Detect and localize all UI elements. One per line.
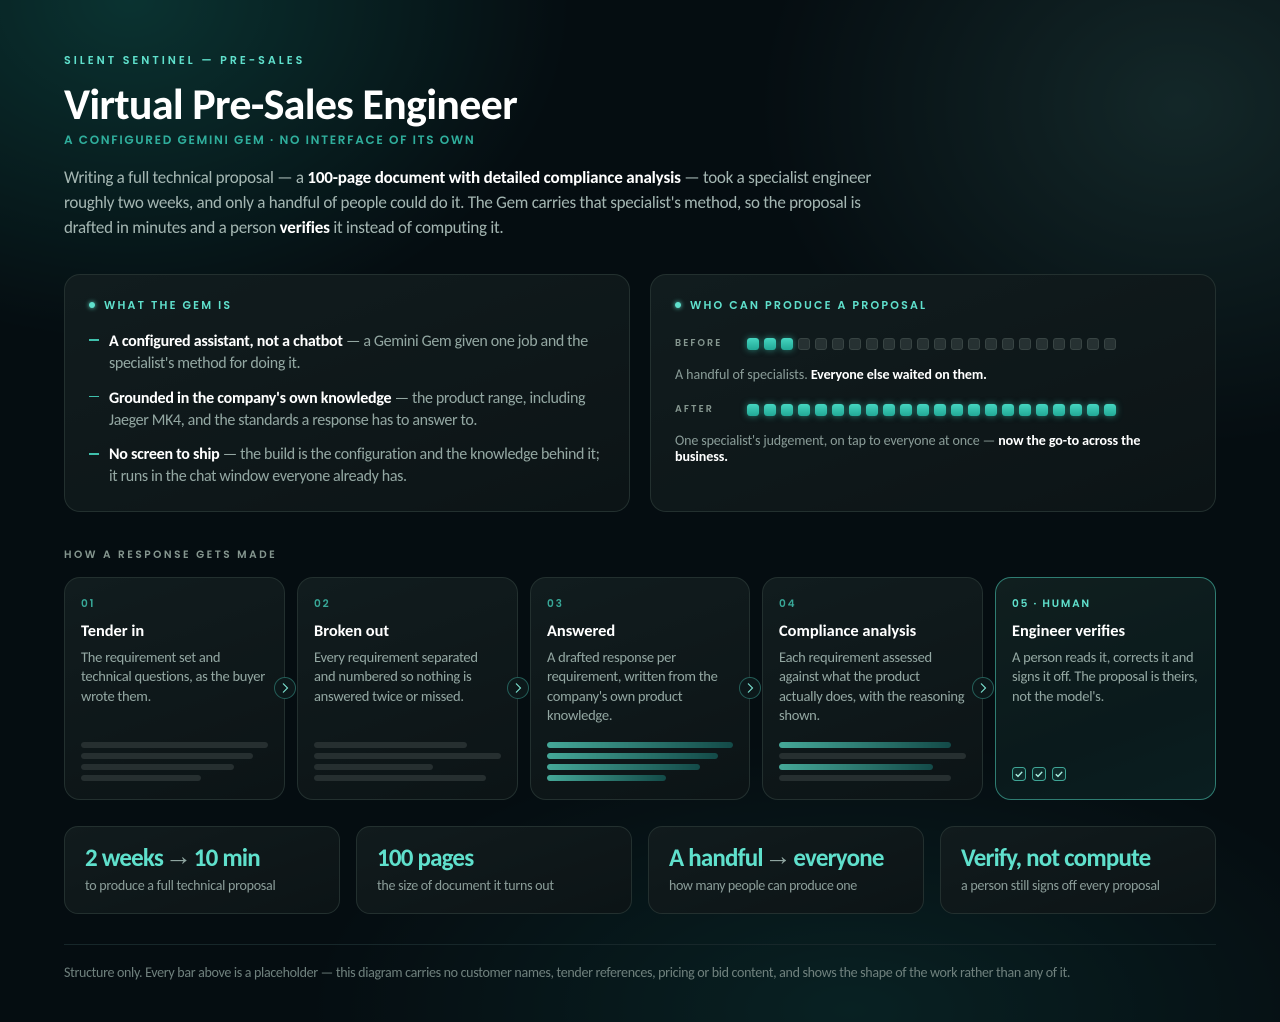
- section heading: HOW A RESPONSE GETS MADE: [64, 547, 277, 562]
- intro paragraph: drafted in minutes and a person verifies it instead of computing it.: [64, 217, 503, 238]
- step number: 03: [547, 596, 564, 611]
- list item 1: [109, 332, 588, 373]
- list item 2: [109, 389, 586, 430]
- step description: The requirement set and: [81, 648, 220, 666]
- step description: [547, 648, 718, 724]
- step description: shown.: [779, 706, 820, 724]
- panel: who can produce a proposal: [650, 274, 1216, 512]
- before dot row: [742, 334, 1116, 354]
- arrow 2: [507, 677, 529, 699]
- arrow 4: [972, 677, 994, 699]
- step description: knowledge.: [547, 706, 612, 724]
- stat value: 100 pages: [377, 842, 473, 873]
- step title: Tender in: [81, 621, 144, 641]
- panel: what the gem is: [64, 274, 630, 512]
- step 5: human: [995, 577, 1216, 800]
- step description: and numbered so nothing is: [314, 667, 471, 685]
- after dot row: [742, 400, 1120, 420]
- step description: not the model's.: [1012, 687, 1104, 705]
- intro paragraph: roughly two weeks, and only a handful of people could do it. The Gem carries that specialist's method, so the proposal is: [64, 192, 861, 213]
- step title: Broken out: [314, 621, 389, 641]
- list item 1: A configured assistant, not a chatbot — a Gemini Gem given one job and the: [109, 332, 588, 351]
- step description: A drafted response per: [547, 648, 676, 666]
- step title: Engineer verifies: [1012, 621, 1125, 641]
- placeholder bars: [81, 742, 268, 781]
- step description: Every requirement separated: [314, 648, 478, 666]
- step number: 04: [779, 596, 796, 611]
- step description: answered twice or missed.: [314, 687, 464, 705]
- list item 3: it runs in the chat window everyone already has.: [109, 467, 407, 486]
- step description: requirement, written from the: [547, 667, 718, 685]
- step description: wrote them.: [81, 687, 151, 705]
- eyebrow: SILENT SENTINEL — PRE-SALES: [64, 52, 305, 68]
- stat value: 2 weeks → 10 min: [85, 841, 260, 873]
- stat: people: [648, 826, 924, 914]
- stat caption: the size of document it turns out: [377, 877, 554, 894]
- list item 2: Jaeger MK4, and the standards a response has to answer to.: [109, 411, 477, 430]
- stat caption: a person still signs off every proposal: [961, 877, 1160, 894]
- intro paragraph: [64, 167, 871, 238]
- before caption: A handful of specialists. Everyone else waited on them.: [675, 366, 987, 383]
- step description: actually does, with the reasoning: [779, 687, 964, 705]
- list dashes: [89, 339, 99, 340]
- after caption: [675, 432, 1140, 465]
- panel heading: WHAT THE GEM IS: [104, 297, 232, 313]
- subtitle: A CONFIGURED GEMINI GEM · NO INTERFACE OF ITS OWN: [64, 132, 475, 149]
- step title: Compliance analysis: [779, 621, 916, 641]
- step description: signs it off. The proposal is theirs,: [1012, 667, 1197, 685]
- step title: Answered: [547, 621, 615, 641]
- title: Virtual Pre-Sales Engineer: [64, 77, 517, 131]
- step description: against what the product: [779, 667, 920, 685]
- step description: A person reads it, corrects it and: [1012, 648, 1193, 666]
- list item 1: specialist's method for doing it.: [109, 354, 300, 373]
- arrow 1: [274, 677, 296, 699]
- step description: [81, 648, 265, 705]
- after caption: One specialist's judgement, on tap to everyone at once — now the go-to across the: [675, 432, 1140, 449]
- stat value: A handful → everyone: [669, 841, 884, 873]
- footer note: Structure only. Every bar above is a placeholder — this diagram carries no customer names, tender references, pricing or bid content, and shows the shape of the work rather than any of it.: [64, 964, 1070, 981]
- check boxes: [1012, 767, 1066, 781]
- step description: [314, 648, 478, 705]
- stat: size: [356, 826, 632, 914]
- stat: time: [64, 826, 340, 914]
- stat value: Verify, not compute: [961, 842, 1150, 873]
- step 1: [64, 577, 285, 800]
- list item 3: No screen to ship — the build is the configuration and the knowledge behind it;: [109, 445, 600, 464]
- step description: [1012, 648, 1197, 705]
- step description: company's own product: [547, 687, 682, 705]
- stat caption: to produce a full technical proposal: [85, 877, 275, 894]
- arrow 3: [739, 677, 761, 699]
- step number: 01: [81, 596, 95, 611]
- step description: Each requirement assessed: [779, 648, 932, 666]
- list item 2: Grounded in the company's own knowledge — the product range, including: [109, 389, 585, 408]
- step 4: [762, 577, 983, 800]
- step 3: [530, 577, 750, 800]
- step number: 02: [314, 596, 330, 611]
- list item 3: [109, 445, 600, 486]
- panel heading: WHO CAN PRODUCE A PROPOSAL: [690, 297, 927, 313]
- step description: [779, 648, 964, 724]
- placeholder bars: [314, 742, 501, 781]
- intro paragraph: Writing a full technical proposal — a 100-page document with detailed compliance analysis — took a specialist engineer: [64, 167, 871, 188]
- after label: AFTER: [675, 403, 714, 416]
- filled bars: [547, 742, 733, 781]
- step description: technical questions, as the buyer: [81, 667, 265, 685]
- step 2: [297, 577, 518, 800]
- stat: verify: [940, 826, 1216, 914]
- mixed bars: [779, 742, 966, 781]
- before label: BEFORE: [675, 337, 722, 350]
- stat caption: how many people can produce one: [669, 877, 857, 894]
- after caption: business.: [675, 448, 728, 465]
- step number: 05 · HUMAN: [1012, 596, 1091, 611]
